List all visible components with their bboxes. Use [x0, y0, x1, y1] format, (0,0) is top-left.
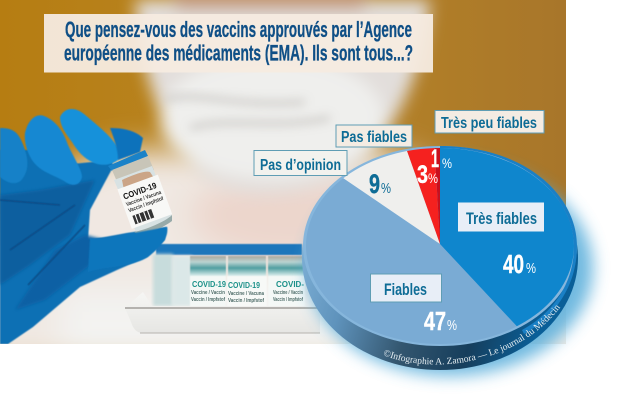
label: fiables: Fiables — [384, 280, 427, 299]
slice: fiables 47% — [306, 178, 516, 344]
label: pas d'opinion — [254, 150, 347, 176]
vial labels on tray: COVID-19 — [228, 280, 260, 290]
vial labels on tray: COVID- — [276, 279, 304, 289]
title box — [44, 14, 433, 72]
tray of vials: Vaccine / Vaccin — [273, 290, 303, 296]
value: 47%: 47 — [424, 306, 446, 336]
pie rim bevel — [303, 146, 577, 346]
value: 3%: 3 — [417, 161, 428, 189]
pie right edge — [440, 146, 577, 334]
label: très fiables: Très fiables — [466, 209, 537, 228]
title box: Que pensez-vous des vaccins approuvés par l’Agence — [65, 17, 412, 42]
tray of vials: Vaccin / Impfstof — [273, 297, 303, 303]
value: 47%: % — [447, 317, 457, 334]
slice: pas d'opinion 9% — [343, 151, 440, 244]
mask folds — [165, 97, 330, 128]
covid vial: Vaccin / Impfstof — [128, 196, 165, 214]
title box: européenne des médicaments (EMA). Ils sont tous...? — [64, 40, 413, 66]
slice: pas fiables 3% — [407, 148, 440, 244]
covid vial: Vaccine / Vacuna — [125, 190, 163, 208]
tray of vials: Vaccin / Impfstof — [191, 297, 225, 303]
value: 40%: % — [526, 260, 536, 277]
value: 40%: 40 — [503, 249, 524, 279]
slice: très peu fiables 1% — [434, 148, 440, 244]
value: 1%: % — [442, 155, 452, 171]
label: très peu fiables: Très peu fiables — [441, 115, 537, 132]
photo background: lab worker — [0, 0, 566, 344]
tray of vials: Vaccine / Vaccin — [191, 290, 225, 296]
fingers — [0, 128, 27, 183]
vial labels on tray: COVID-19 — [192, 279, 226, 289]
label: pas fiables — [336, 125, 412, 147]
vial labels on tray — [192, 281, 304, 288]
value: 9%: 9 — [369, 169, 380, 199]
tray of vials: Vaccin / Impfstof — [228, 298, 264, 304]
slice: très fiables 40% — [440, 148, 574, 326]
tray of vials: Vaccine / Vacuna — [228, 291, 264, 297]
credit — [383, 309, 559, 364]
label: très fiables — [458, 202, 544, 232]
pie chart: ©Infographie A. Zamora — Le journal du Médecin — [384, 306, 560, 366]
value: 1% — [431, 145, 452, 173]
value: 3% — [417, 161, 438, 189]
label: pas d'opinion: Pas d’opinion — [260, 157, 341, 174]
value: 3%: % — [428, 170, 438, 186]
label: pas fiables: Pas fiables — [341, 129, 407, 146]
covid vial: COVID-19 — [122, 180, 158, 202]
value: 1%: 1 — [431, 145, 439, 173]
value: 9%: % — [381, 180, 391, 197]
blue gloved hand — [0, 109, 167, 344]
pie glow — [307, 160, 593, 376]
value: 9% — [369, 169, 391, 199]
pie rim — [302, 146, 578, 370]
tray of vials — [125, 244, 320, 333]
pie chart — [296, 146, 605, 388]
label: fiables — [370, 274, 442, 302]
lower thumb over the vial — [88, 227, 167, 272]
covid vial — [112, 156, 172, 234]
label: très peu fiables — [435, 110, 544, 133]
